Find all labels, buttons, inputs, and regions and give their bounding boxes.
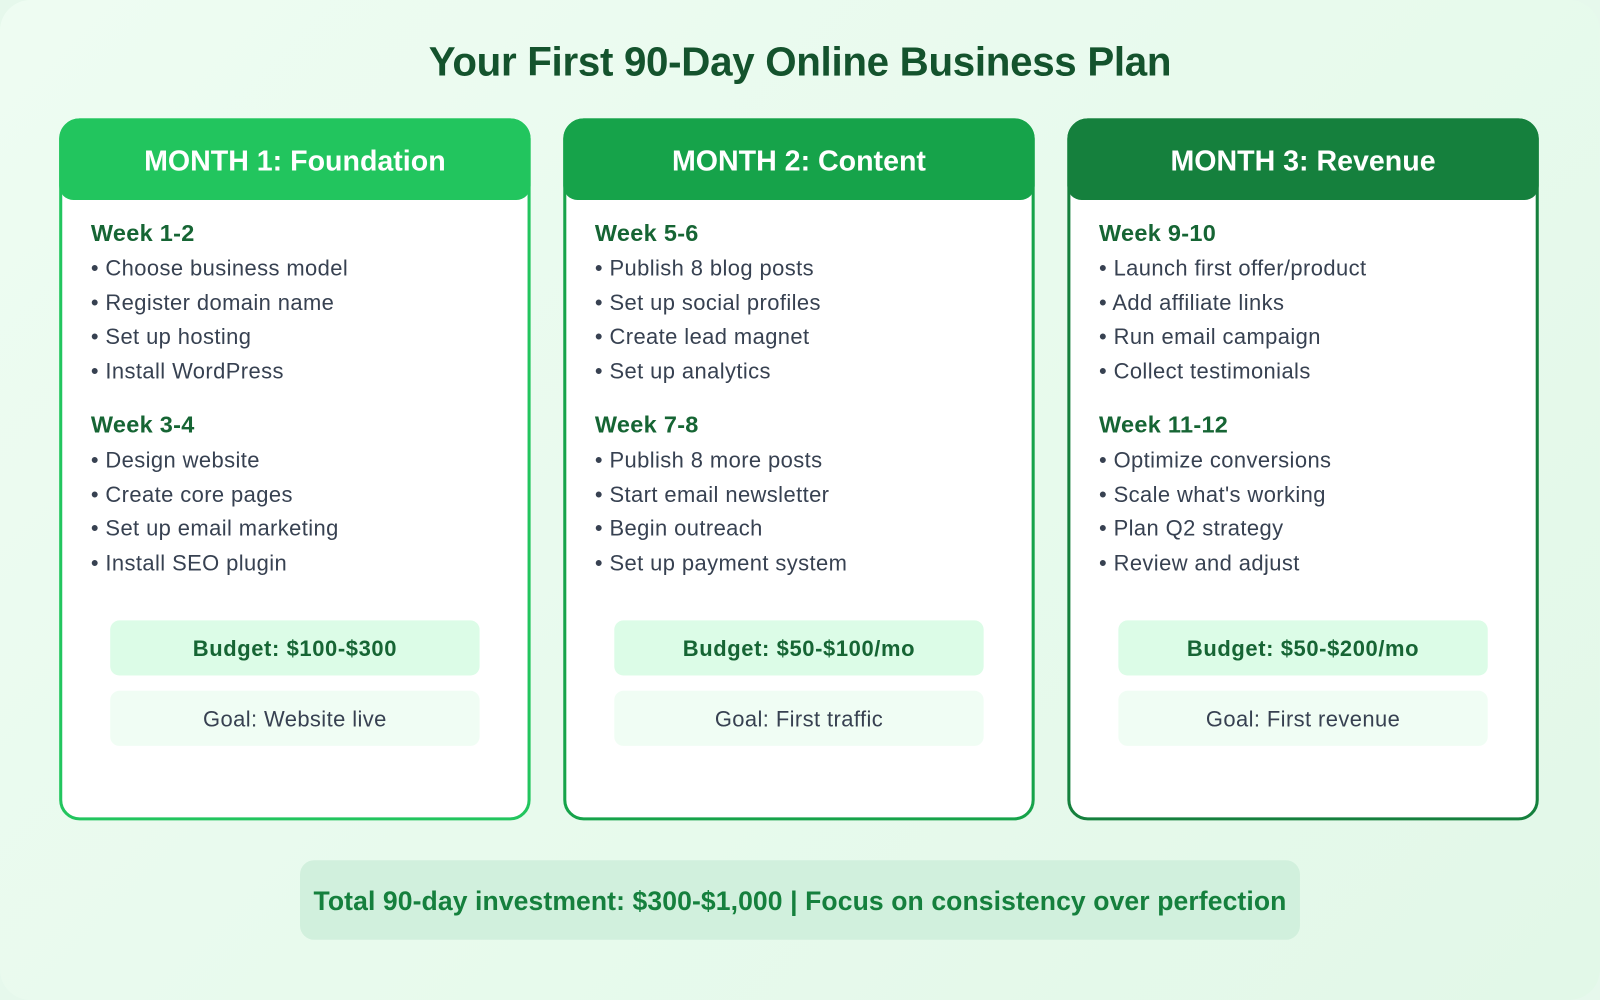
week 5-6 list: • Create lead magnet: [595, 324, 810, 349]
week 7-8 list: • Publish 8 more posts: [595, 448, 823, 472]
week 7-8 list: • Begin outreach: [595, 516, 763, 541]
budget: [110, 620, 480, 676]
week 1-2 list: • Set up hosting: [91, 324, 251, 349]
week 9-10 list: • Launch first offer/product: [1099, 256, 1366, 281]
week 11-12 heading: Week 11-12: [1099, 411, 1228, 438]
week 3-4 list: • Design website: [91, 448, 260, 472]
budget: Budget: $100-$300: [193, 637, 397, 661]
week 11-12 list: • Review and adjust: [1099, 551, 1300, 575]
week 5-6 list: • Set up analytics: [595, 359, 771, 383]
week 3-4 list: [91, 448, 339, 575]
panel: month 1: [59, 118, 531, 820]
week 1-2 list: • Choose business model: [91, 256, 348, 281]
week 7-8 list: [595, 448, 847, 575]
header: month 2: [563, 118, 1035, 200]
title: Your First 90-Day Online Business Plan: [429, 40, 1171, 85]
week 1-2 list: [91, 256, 348, 383]
week 5-6 heading: Week 5-6: [595, 219, 699, 246]
goal: Goal: First traffic: [715, 707, 883, 732]
week 9-10 list: • Add affiliate links: [1099, 290, 1284, 315]
week 7-8 list: • Start email newsletter: [595, 482, 829, 507]
week 9-10 heading: Week 9-10: [1099, 219, 1216, 246]
week 1-2 list: • Register domain name: [91, 290, 334, 315]
week 3-4 heading: Week 3-4: [91, 411, 195, 438]
budget: [1118, 620, 1488, 676]
week 3-4 list: • Create core pages: [91, 482, 293, 507]
week 5-6 list: • Set up social profiles: [595, 290, 821, 315]
week 9-10 list: • Collect testimonials: [1099, 359, 1311, 383]
panel: month 2: [563, 118, 1035, 820]
goal: Goal: First revenue: [1206, 707, 1400, 732]
budget: Budget: $50-$100/mo: [683, 637, 915, 661]
header: month 1: [59, 118, 531, 200]
week 9-10 list: • Run email campaign: [1099, 324, 1321, 349]
week 11-12 list: • Scale what's working: [1099, 482, 1326, 507]
header: month 2: MONTH 2: Content: [672, 145, 926, 177]
panel: month 3: [1067, 118, 1539, 820]
week 3-4 list: • Set up email marketing: [91, 516, 339, 541]
week 3-4 list: • Install SEO plugin: [91, 551, 287, 575]
header: month 3: [1067, 118, 1539, 200]
week 1-2 heading: Week 1-2: [91, 219, 195, 246]
budget: Budget: $50-$200/mo: [1187, 637, 1419, 661]
goal: [1118, 691, 1488, 746]
week 1-2 list: • Install WordPress: [91, 359, 284, 383]
week 11-12 list: • Plan Q2 strategy: [1099, 516, 1284, 541]
week 5-6 list: • Publish 8 blog posts: [595, 256, 814, 281]
week 11-12 list: • Optimize conversions: [1099, 448, 1331, 472]
week 9-10 list: [1099, 256, 1366, 383]
week 7-8 heading: Week 7-8: [595, 411, 699, 438]
week 5-6 list: [595, 256, 821, 383]
week 7-8 list: • Set up payment system: [595, 551, 847, 575]
header: month 1: MONTH 1: Foundation: [144, 145, 446, 177]
footer callout: [300, 860, 1300, 940]
week 11-12 list: [1099, 448, 1331, 575]
goal: [110, 691, 480, 746]
budget: [614, 620, 984, 676]
goal: Goal: Website live: [203, 707, 387, 732]
goal: [614, 691, 984, 746]
header: month 3: MONTH 3: Revenue: [1170, 145, 1436, 177]
footer callout: Total 90-day investment: $300-$1,000 | Focus on consistency over perfection: [314, 886, 1286, 916]
